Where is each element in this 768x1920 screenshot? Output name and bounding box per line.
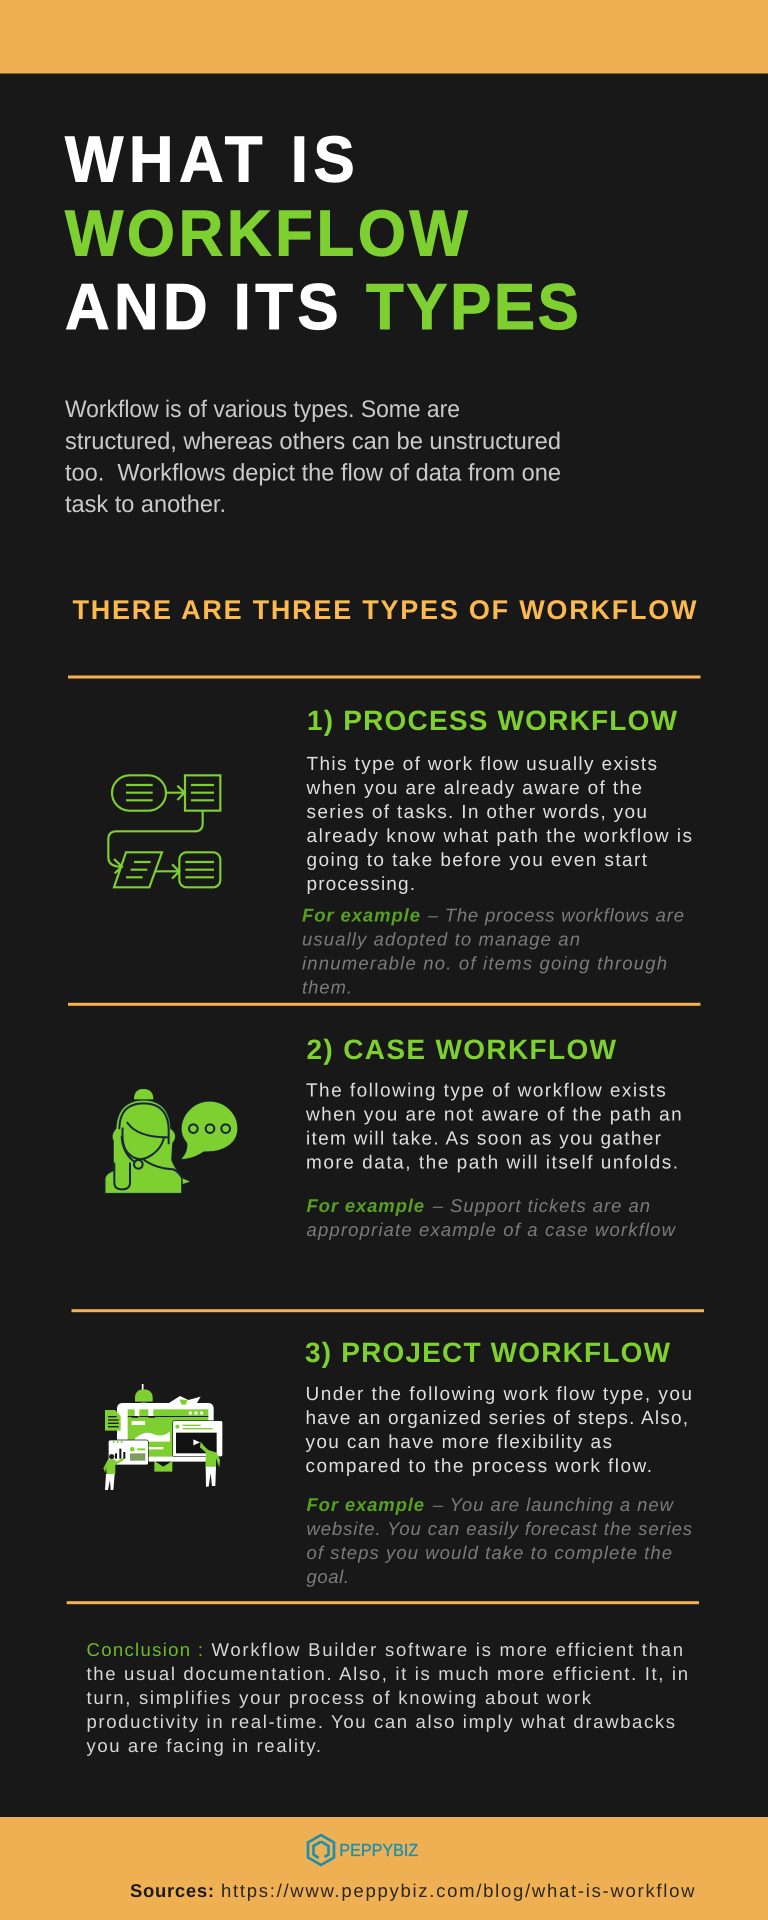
document <box>105 1410 121 1431</box>
description: case workflow: more data, the path will itself unfolds. <box>306 1153 678 1174</box>
example: project workflow: goal. <box>306 1566 349 1587</box>
left person <box>109 1454 114 1459</box>
envelope <box>154 1462 172 1472</box>
chart panel <box>108 1440 148 1465</box>
panel: case workflow <box>105 1034 682 1240</box>
top banner <box>0 0 768 74</box>
title: WORKFLOW <box>65 196 468 270</box>
description: project workflow: have an organized series of steps. Also, <box>306 1408 688 1429</box>
heading: case workflow: 2) CASE WORKFLOW <box>306 1034 617 1065</box>
conclusion text <box>86 1639 688 1756</box>
description: process workflow: processing. <box>306 874 415 895</box>
description: process workflow: This type of work flow usually exists <box>306 754 657 775</box>
intro paragraph: Workflow is of various types. Some are <box>65 396 460 423</box>
intro paragraph: structured, whereas others can be unstructured <box>65 428 561 455</box>
example: case workflow: appropriate example of a case workflow <box>306 1219 677 1240</box>
description: process workflow: series of tasks. In other words, you <box>306 802 647 823</box>
top right tool <box>168 1396 201 1403</box>
title: WHAT IS <box>65 123 355 196</box>
panel: process workflow <box>108 705 692 998</box>
heading: process workflow: 1) PROCESS WORKFLOW <box>307 705 678 736</box>
logo: PeppyBiz: PEPPYBIZ <box>339 1840 419 1860</box>
example: case workflow <box>306 1195 677 1240</box>
example: process workflow: usually adopted to manage an <box>302 929 580 950</box>
right person <box>208 1446 213 1451</box>
title <box>65 123 579 343</box>
heading: project workflow: 3) PROJECT WORKFLOW <box>305 1337 671 1368</box>
logo: PeppyBiz <box>308 1835 419 1865</box>
intro paragraph: too. Workflows depict the flow of data from one <box>65 459 561 486</box>
video panel <box>173 1421 223 1457</box>
description: project workflow: compared to the process work flow. <box>306 1456 652 1477</box>
conclusion text: Workflow Builder software is more efficient than <box>212 1639 683 1660</box>
description: process workflow: when you are already aware of the <box>306 778 642 799</box>
bottom banner <box>0 1817 768 1920</box>
description: case workflow: The following type of workflow exists <box>306 1081 666 1102</box>
title: TYPES <box>366 270 579 343</box>
description: case workflow <box>305 1081 682 1174</box>
description: case workflow: when you are not aware of the path an <box>305 1105 682 1126</box>
example: process workflow: them. <box>302 977 352 998</box>
example: process workflow: – The process workflows are <box>427 905 684 926</box>
robot <box>140 1384 145 1390</box>
description: project workflow: Under the following work flow type, you <box>306 1384 692 1405</box>
icon: support agent with speech bubble <box>105 1089 238 1193</box>
sources line: https://www.peppybiz.com/blog/what-is-workflow <box>221 1880 695 1901</box>
example: process workflow <box>302 905 684 998</box>
example: process workflow: For example <box>302 905 420 926</box>
description: case workflow: item will take. As soon as you gather <box>306 1129 662 1150</box>
example: project workflow <box>306 1494 692 1587</box>
conclusion text: turn, simplifies your process of knowing about work <box>86 1687 592 1708</box>
subheading: THERE ARE THREE TYPES OF WORKFLOW <box>72 595 697 625</box>
title: AND ITS <box>65 270 339 343</box>
description: process workflow: already know what path the workflow is <box>306 826 692 847</box>
example: process workflow: innumerable no. of items going through <box>302 953 667 974</box>
example: project workflow: website. You can easily forecast the series <box>306 1518 692 1539</box>
description: project workflow: you can have more flexibility as <box>306 1432 612 1453</box>
example: project workflow: – You are launching a new <box>432 1494 675 1515</box>
intro paragraph: task to another. <box>65 491 226 518</box>
conclusion text: productivity in real-time. You can also imply what drawbacks <box>86 1711 675 1732</box>
example: case workflow: – Support tickets are an <box>432 1195 650 1216</box>
icon: hexagon logo mark <box>308 1835 334 1865</box>
conclusion text: the usual documentation. Also, it is much more efficient. It, in <box>86 1663 688 1684</box>
conclusion text: Conclusion : <box>86 1639 203 1660</box>
description: process workflow: going to take before you even start <box>306 850 648 871</box>
example: project workflow: of steps you would take to complete the <box>306 1542 672 1563</box>
example: project workflow: For example <box>306 1494 424 1515</box>
icon: website project illustration <box>103 1384 223 1490</box>
panel: project workflow <box>103 1337 692 1587</box>
description: project workflow <box>306 1384 692 1477</box>
intro paragraph <box>65 396 561 518</box>
conclusion text: you are facing in reality. <box>86 1735 321 1756</box>
example: case workflow: For example <box>306 1195 424 1216</box>
sources line: Sources: <box>130 1880 214 1901</box>
description: process workflow <box>306 754 692 895</box>
icon: process flowchart <box>108 775 220 887</box>
